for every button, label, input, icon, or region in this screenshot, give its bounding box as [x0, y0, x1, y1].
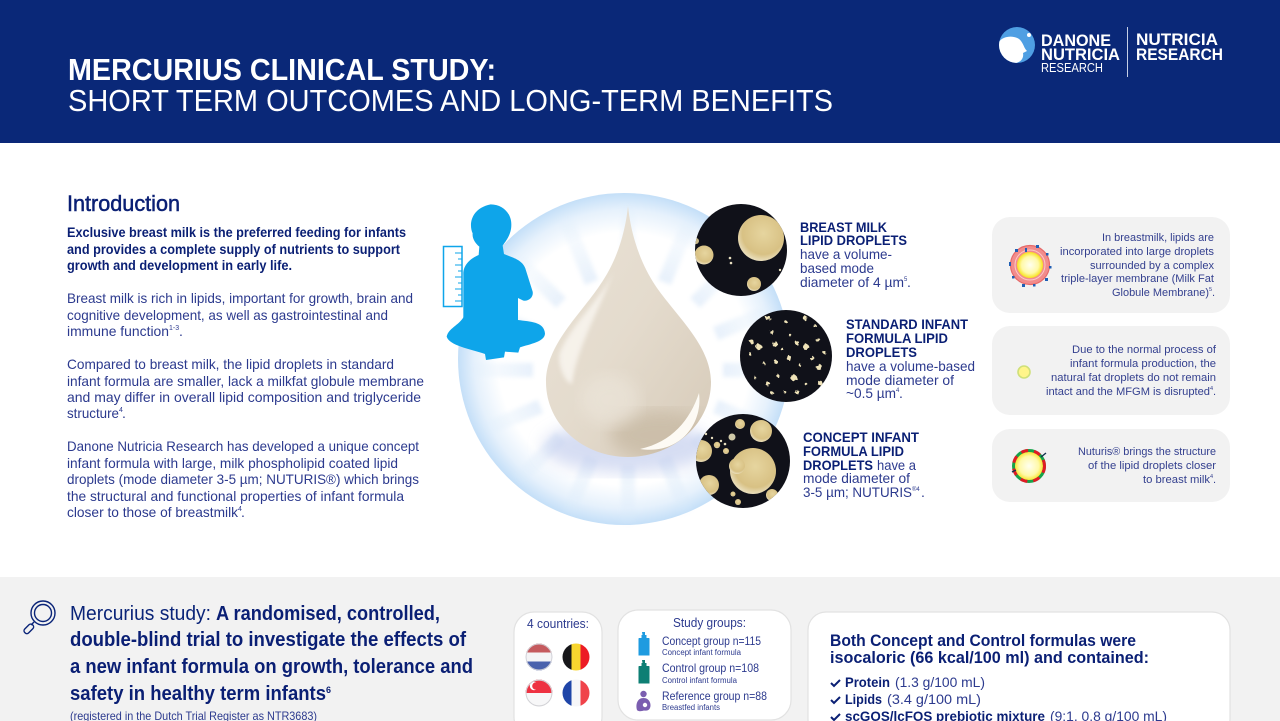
label: breast milk lipid droplets [800, 219, 911, 290]
list: lipids [831, 691, 981, 707]
intro paragraph: compared: 4 [119, 407, 123, 414]
list: protein [831, 674, 985, 690]
logo: Danone Nutricia Research: NUTRICIA [1136, 30, 1218, 49]
study heading: double-blind trial to investigate the effects of [70, 629, 466, 651]
formula heading: isocaloric (66 kcal/100 ml) and contained: [830, 649, 1149, 667]
flag: France [562, 679, 590, 707]
text: Nuturis: . [1213, 474, 1216, 486]
label: standard infant formula lipid droplets: DROPLETS [846, 344, 917, 360]
text: standard formula process [1046, 344, 1217, 398]
card: study groups: Study groups: [673, 615, 746, 630]
logo: Danone Nutricia Research: DANONE [1041, 31, 1111, 50]
intro lead paragraph [67, 224, 406, 273]
label: standard infant formula lipid droplets: FORMULA LIPID [846, 330, 948, 346]
intro paragraph: concept formula: infant formula with large, milk phospholipid coated lipid [67, 455, 398, 471]
intro paragraph: compared [67, 356, 424, 421]
icon: seated child silhouette [444, 204, 545, 360]
logo: Danone Nutricia Research: RESEARCH [1136, 45, 1223, 64]
logo: Danone Nutricia Research: RESEARCH [1041, 60, 1103, 75]
title: MERCURIUS CLINICAL STUDY: [68, 52, 496, 87]
icon: green bottle [638, 660, 650, 684]
introduction heading: Introduction [67, 191, 180, 216]
group: reference: Reference group n=88 [662, 689, 767, 703]
label: concept infant formula lipid droplets: 3-5 µm; NUTURIS [803, 484, 912, 500]
label: concept infant formula lipid droplets: have a [877, 457, 916, 473]
label: standard infant formula lipid droplets: have a volume-based [846, 358, 975, 374]
intro paragraph: concept formula: droplets (mode diameter 3-5 µm; NUTURIS®) which brings [67, 471, 419, 487]
panel: Mercurius study section [0, 577, 1280, 721]
icon: small droplet [1018, 366, 1030, 378]
label: breast milk lipid droplets: diameter of 4 µm [800, 274, 904, 290]
text: Nuturis: 4 [1210, 474, 1213, 480]
label: breast milk lipid droplets: . [907, 274, 911, 290]
label: concept infant formula lipid droplets: FORMULA LIPID [803, 443, 904, 459]
panel: standard formula process [992, 326, 1230, 415]
logo: Danone Nutricia Research [999, 27, 1223, 77]
text: standard formula process: Due to the normal process of [1072, 344, 1217, 356]
title [68, 52, 833, 118]
group: reference [662, 689, 767, 712]
flag: Netherlands [525, 643, 553, 671]
formula heading [830, 632, 1149, 667]
intro paragraph: lipids: cognitive development, as well as gastrointestinal and [67, 307, 388, 323]
label: standard infant formula lipid droplets: mode diameter of [846, 372, 954, 388]
label: breast milk lipid droplets: have a volume- [800, 246, 892, 262]
text: Nuturis: to breast milk [1143, 474, 1210, 486]
introduction text block [67, 191, 424, 520]
flag: Singapore [525, 679, 553, 707]
list: lipids: (3.4 g/100 mL) [887, 691, 981, 707]
label: concept infant formula lipid droplets: CONCEPT INFANT [803, 429, 919, 445]
label: standard infant formula lipid droplets [846, 316, 975, 401]
icon: Nuturis droplet [1012, 450, 1046, 482]
text: standard formula process: natural fat droplets do not remain [1051, 372, 1216, 384]
text: standard formula process: infant formula production, the [1070, 358, 1216, 370]
logo: Danone Nutricia Research: NUTRICIA [1041, 45, 1120, 64]
group: reference: Breastfed infants [662, 703, 720, 712]
intro paragraph: concept formula: the structural and functional properties of infant formula [67, 488, 404, 504]
text: standard formula process: 4 [1210, 386, 1213, 392]
study heading: 6 [326, 685, 331, 695]
study heading: A randomised, controlled, [216, 603, 440, 625]
study heading: safety in healthy term infants [70, 683, 326, 705]
label: standard infant formula lipid droplets: STANDARD INFANT [846, 316, 968, 332]
intro lead paragraph: growth and development in early life. [67, 257, 292, 273]
label: standard infant formula lipid droplets: 4 [896, 388, 900, 394]
icon: droplet with triple-layer membrane [1009, 245, 1052, 287]
group: control: Control group n=108 [662, 661, 759, 675]
label: breast milk lipid droplets: LIPID DROPLETS [800, 232, 907, 248]
label: standard infant formula lipid droplets: . [899, 385, 903, 401]
intro paragraph: lipids: . [179, 323, 183, 339]
intro paragraph: lipids: immune function [67, 323, 169, 339]
intro lead paragraph: and provides a complete supply of nutrients to support [67, 241, 400, 257]
text: Nuturis: Nuturis® brings the structure [1078, 446, 1216, 458]
label: breast milk lipid droplets: 5 [904, 277, 908, 283]
list: prebiotic mixture [831, 708, 1167, 721]
study heading: Mercurius study: [70, 603, 211, 625]
text: standard formula process: intact and the MFGM is disrupted [1046, 386, 1210, 398]
icon: ruler [444, 246, 462, 306]
flag: Belgium [562, 643, 590, 671]
card: formula composition [808, 612, 1230, 721]
card: 4 countries: 4 countries: [527, 616, 589, 631]
group: concept [662, 634, 761, 657]
label: concept infant formula lipid droplets [803, 429, 925, 500]
list: protein: Protein [845, 674, 890, 690]
intro lead paragraph: Exclusive breast milk is the preferred feeding for infants [67, 224, 406, 240]
intro paragraph: concept formula: 4 [238, 506, 242, 513]
card: study groups [618, 610, 791, 720]
header band [0, 0, 1280, 143]
text: breast milk membrane: In breastmilk, lipids are [1102, 232, 1214, 244]
icon: breastfeeding mother [636, 691, 651, 711]
group: concept: Concept infant formula [662, 648, 742, 657]
text: breast milk membrane: . [1212, 287, 1215, 299]
intro paragraph: compared: structure [67, 405, 119, 421]
intro paragraph: concept formula [67, 438, 419, 520]
intro paragraph: compared: . [122, 405, 126, 421]
intro paragraph: compared: and may differ in overall lipid composition and triglyceride [67, 389, 421, 405]
text: Nuturis: of the lipid droplets closer [1088, 460, 1216, 472]
intro paragraph: lipids: Breast milk is rich in lipids, important for growth, brain and [67, 290, 413, 306]
panel: Nuturis [992, 429, 1230, 502]
label: concept infant formula lipid droplets: ®4 [912, 486, 920, 493]
text: standard formula process: . [1213, 386, 1216, 398]
label: concept infant formula lipid droplets: DROPLETS [803, 457, 873, 473]
label: breast milk lipid droplets: BREAST MILK [800, 219, 887, 235]
text: breast milk membrane: surrounded by a complex [1090, 260, 1214, 272]
group: control [662, 661, 759, 685]
milk drop [546, 206, 711, 459]
text: Nuturis [1078, 446, 1216, 486]
micrograph: concept formula droplets [690, 414, 790, 508]
central illustration: glowing disc with milk drop [458, 193, 790, 525]
label: breast milk lipid droplets: based mode [800, 260, 874, 276]
list: protein: (1.3 g/100 mL) [895, 674, 985, 690]
text: breast milk membrane: Globule Membrane) [1112, 287, 1209, 299]
intro paragraph: concept formula: . [241, 504, 245, 520]
label: concept infant formula lipid droplets: mode diameter of [803, 470, 910, 486]
list: lipids: Lipids [845, 691, 882, 707]
text: breast milk membrane: incorporated into large droplets [1060, 246, 1214, 258]
group: concept: Concept group n=115 [662, 634, 761, 648]
text: breast milk membrane: triple-layer membrane (Milk Fat [1061, 273, 1214, 285]
study heading: a new infant formula on growth, tolerance and [70, 656, 473, 678]
text: breast milk membrane: 5 [1209, 287, 1212, 293]
group: control: Control infant formula [662, 676, 738, 685]
intro paragraph: compared: Compared to breast milk, the lipid droplets in standard [67, 356, 394, 372]
formula heading: Both Concept and Control formulas were [830, 632, 1136, 650]
icon: magnifying glass [23, 601, 55, 635]
label: concept infant formula lipid droplets: . [921, 484, 925, 500]
label: standard infant formula lipid droplets: ~0.5 µm [846, 385, 896, 401]
intro paragraph: compared: infant formula are smaller, lack a milkfat globule membrane [67, 373, 424, 389]
micrograph: breast milk droplets [693, 204, 787, 296]
light rays [473, 205, 783, 525]
micrograph: standard formula droplets [740, 310, 832, 402]
intro paragraph: concept formula: Danone Nutricia Research has developed a unique concept [67, 438, 419, 454]
intro paragraph: concept formula: closer to those of breastmilk [67, 504, 239, 520]
card: 4 countries [514, 612, 602, 721]
intro paragraph: lipids: 1-3 [169, 325, 179, 332]
intro paragraph: lipids [67, 290, 413, 339]
icon: blue bottle [638, 632, 650, 656]
panel: breast milk membrane [992, 217, 1230, 313]
study heading [70, 603, 473, 705]
title: SHORT TERM OUTCOMES AND LONG-TERM BENEFITS [68, 83, 833, 118]
text: breast milk membrane [1060, 232, 1215, 299]
